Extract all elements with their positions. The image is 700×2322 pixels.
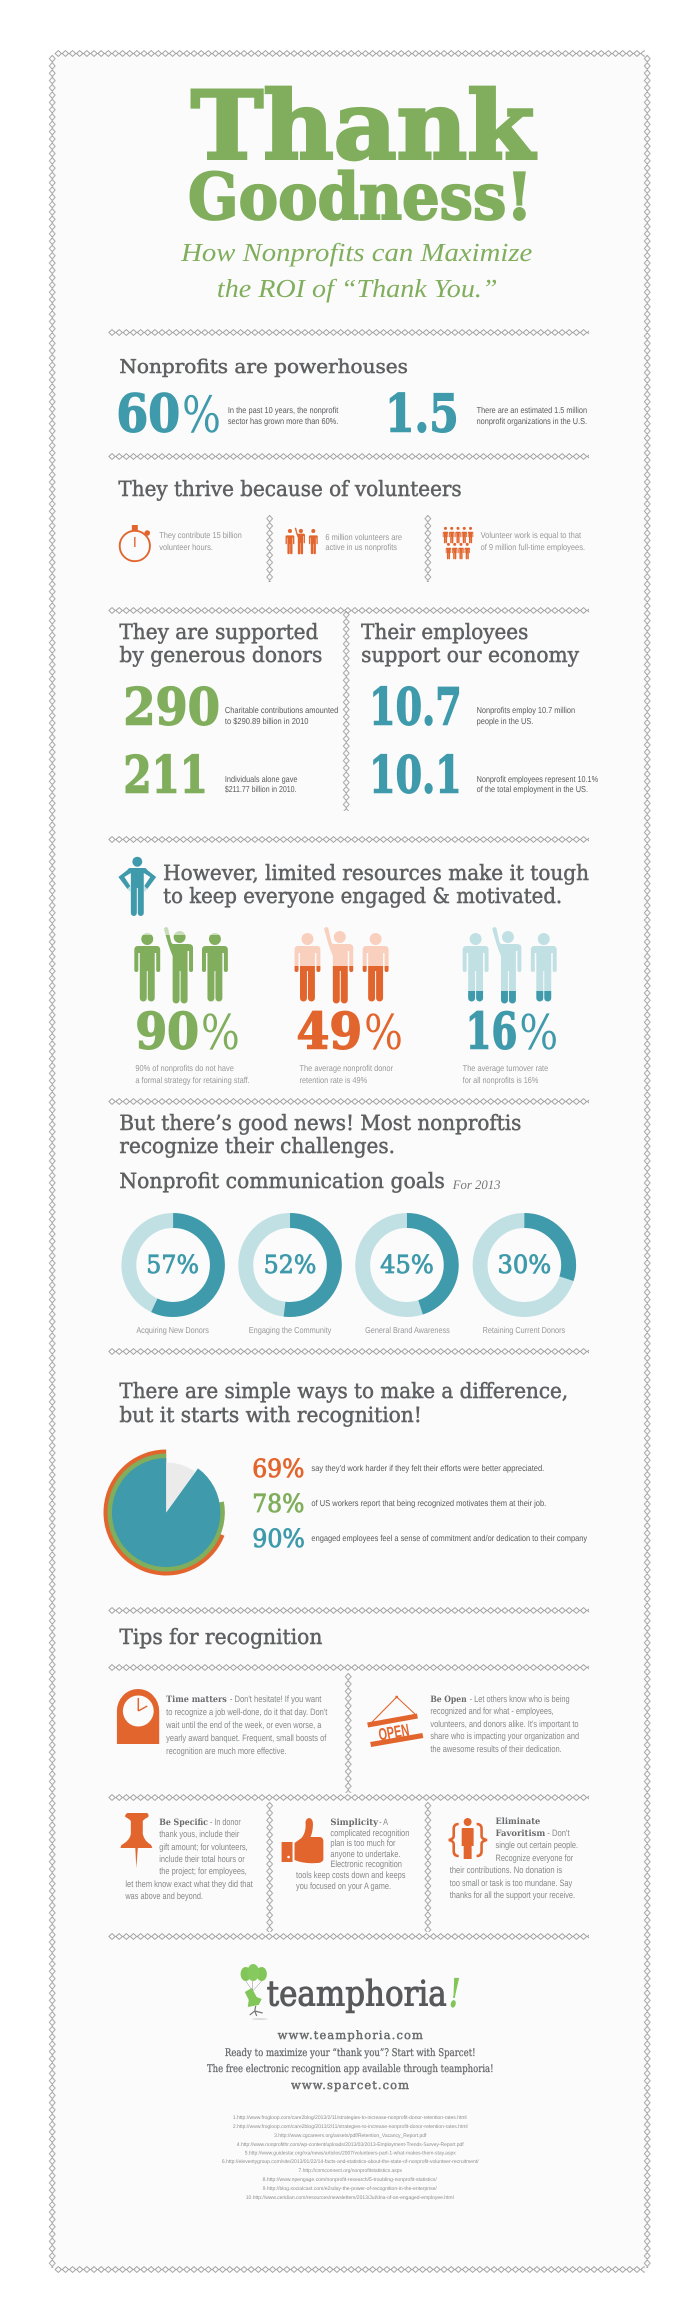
text: simplicity: - A — [379, 1817, 389, 1827]
caption: 16% — [463, 1063, 548, 1085]
text: employ: Nonprofits employ 10.7 million — [477, 705, 575, 715]
text: be specific: let them know exact what they did that — [125, 1879, 253, 1889]
text: eliminate favoritism: too small or task is too mundane. Say — [450, 1878, 572, 1888]
text: charitable contributions — [225, 705, 338, 726]
heading: employees — [361, 620, 579, 667]
panel: tip eliminate favoritism — [449, 1817, 578, 1900]
text: be open: the awesome results of their dedication. — [430, 1744, 562, 1754]
text: time matters: wait until the end of the week, or even worse, a — [165, 1720, 322, 1730]
heading: limited resources — [163, 861, 589, 908]
donut chart: 57%: 57% — [146, 1250, 199, 1279]
icon group: green people 90% — [134, 927, 228, 1004]
text: be specific: thank yous, include their — [159, 1829, 239, 1839]
stat: 60%: % — [182, 386, 221, 444]
stat: 90%: engaged employees feel a sense of commitment and/or dedication to their company — [311, 1533, 588, 1543]
subtitle — [180, 238, 532, 303]
stat: 60% — [116, 384, 221, 444]
text: eliminate favoritism: their contributions. No donation is — [450, 1865, 563, 1875]
heading: employees: Their employees — [361, 620, 528, 644]
references: 4.http://www.nonprofithr.com/wp-content/uploads/2013/03/2013-Employment-Trends-Survey-Report.pdf — [237, 2142, 464, 2148]
stat: 90% — [135, 1002, 240, 1061]
panel: tip be open — [367, 1694, 579, 1754]
text: employ: people in the US. — [477, 716, 533, 726]
text: volunteer hours: They contribute 15 billion — [159, 530, 242, 540]
icon: open sign — [367, 1696, 423, 1747]
text: be open: volunteers, and donors alike. It's important to — [430, 1719, 579, 1729]
caption: 90%: a formal strategy for retaining staff. — [135, 1075, 250, 1085]
stat: 60%: 60 — [116, 384, 180, 444]
icon: push pin — [120, 1813, 152, 1868]
heading: donors — [119, 620, 322, 667]
text: simplicity: complicated recognition — [330, 1828, 409, 1838]
text: eliminate favoritism: thanks for all the support your receive. — [450, 1890, 575, 1900]
heading: communication goals: Nonprofit communication goals — [119, 1169, 445, 1193]
text: employment share — [477, 774, 598, 794]
donut chart: 52% — [246, 1220, 334, 1310]
text: be specific: include their total hours or — [159, 1854, 245, 1864]
text: employ — [477, 705, 575, 726]
heading: simple ways: There are simple ways to make a difference, — [119, 1379, 568, 1403]
references — [222, 2115, 479, 2201]
icon: open sign: OPEN — [377, 1720, 411, 1744]
donut chart: 45% — [363, 1220, 451, 1310]
title: Thank — [191, 72, 536, 182]
stat: 69%: say they’d work harder if they felt their efforts were better appreciated. — [311, 1463, 544, 1473]
donut labels — [136, 1325, 565, 1335]
panel: donors — [119, 620, 338, 806]
text: active volunteers: active in us nonprofits — [325, 542, 397, 552]
heading: communication goals: For 2013 — [452, 1177, 501, 1192]
donut labels: General Brand Awareness — [365, 1325, 450, 1335]
wordmark exclamation: ! — [449, 1970, 461, 2017]
references: 1.http://www.frogloop.com/care2blog/2013/2/11/strategies-to-increase-nonprofit-donor-retention-rates.html — [233, 2115, 467, 2121]
heading: donors: They are supported — [119, 620, 318, 644]
donut chart: 57% — [129, 1220, 217, 1310]
text: eliminate favoritism: Eliminate — [496, 1817, 541, 1827]
panel: tip time matters — [117, 1689, 328, 1756]
text: sector growth: In the past 10 years, the nonprofit — [228, 405, 339, 415]
heading: tips for recognition: Tips for recognition — [119, 1625, 322, 1649]
stat: 16%: 16 — [466, 1002, 517, 1060]
references: 8.http://www.npengage.com/nonprofit-research/5-troubling-nonprofit-statistics/ — [263, 2177, 437, 2183]
donut labels: Acquiring New Donors — [136, 1325, 209, 1335]
text: organizations: There are an estimated 1.5 million — [477, 405, 587, 415]
text: sector growth — [228, 405, 339, 426]
heading: employees: support our economy — [361, 643, 579, 667]
call to action — [207, 2028, 494, 2092]
text: time matters: to recognize a job well-done, do it that day. Don't — [166, 1707, 328, 1717]
text: simplicity: anyone to undertake. — [330, 1849, 400, 1859]
donut chart: 45%: 45% — [380, 1250, 434, 1279]
caption: 16%: for all nonprofits is 16% — [463, 1075, 539, 1085]
stat: 1.5: 1.5 — [385, 384, 459, 444]
stat: 69%: 69% — [252, 1454, 304, 1483]
icon group: teal people 16% — [463, 927, 557, 1004]
text: be specific: Be Specific — [159, 1818, 208, 1828]
icon: person in braces — [449, 1818, 487, 1859]
icon: stopwatch — [120, 525, 150, 561]
panel: nonprofits are powerhouses — [116, 356, 587, 444]
logo: teamphoria — [241, 1964, 461, 2020]
text: eliminate favoritism: Favoritism — [496, 1829, 546, 1839]
panel: volunteers — [118, 477, 585, 582]
text: full-time equivalent: Volunteer work is equal to that — [481, 530, 582, 540]
text: organizations — [477, 405, 587, 426]
stat: 49%: % — [364, 1005, 403, 1061]
text: be specific — [125, 1817, 253, 1901]
text: be open: recognized and for what - employees, — [430, 1706, 554, 1716]
stat: 90%: 90% — [252, 1524, 305, 1553]
heading: volunteers: They thrive because of volunteers — [118, 477, 462, 501]
text: eliminate favoritism: - Don't — [547, 1828, 570, 1838]
text: be specific: the project; for employees, — [159, 1866, 247, 1876]
wordmark: teamphoria — [267, 1974, 447, 2014]
references: 7.http://cnmconnect.org/nonprofitstatistics.aspx — [299, 2168, 402, 2174]
text: be specific: gift amount; for volunteers, — [159, 1842, 248, 1852]
text: be specific: was above and beyond. — [125, 1891, 203, 1901]
caption: 49%: The average nonprofit donor — [299, 1063, 393, 1073]
text: volunteer hours: volunteer hours. — [159, 542, 213, 552]
stat: 10.1: 10.1 — [369, 746, 462, 806]
icon group: orange people 49% — [295, 927, 389, 1004]
text: be open: Be Open — [430, 1695, 467, 1705]
text: active volunteers: 6 million volunteers are — [325, 532, 402, 542]
text: time matters: - Don't hesitate! If you want — [230, 1694, 322, 1704]
text: full-time equivalent: of 9 million full-time employees. — [481, 542, 585, 552]
stat: 49% — [297, 1002, 403, 1061]
icon: three volunteers — [286, 528, 318, 554]
panel: simple ways — [104, 1379, 588, 1576]
text: be open: - Let others know who is being — [470, 1694, 570, 1704]
stat: 78%: 78% — [252, 1489, 304, 1518]
references: 3.http://www.cgcareers.org/assets/pdf/Retention_Vacancy_Report.pdf — [274, 2133, 427, 2139]
donut chart: 30% — [480, 1220, 569, 1310]
text: sector growth: sector has grown more than 60%. — [228, 416, 338, 426]
heading: powerhouses: Nonprofits are powerhouses — [119, 356, 408, 378]
text: be open: share who is impacting your organization and — [430, 1731, 579, 1741]
text: simplicity: plan is too much for — [330, 1838, 396, 1848]
text: time matters: recognition are much more effective. — [166, 1746, 287, 1756]
references: 5.http://www.guidestar.org/rxa/news/articles/2007/volunteers-part-1-what-makes-them-stay.aspx — [245, 2150, 456, 2156]
references: 2.http://www.frogloop.com/care2blog/2013/2/11/strategies-to-increase-nonprofit-donor-retention-rates.html — [233, 2124, 468, 2130]
stat: 49%: 49 — [297, 1002, 362, 1060]
text: charitable contributions: Charitable contributions amounted — [225, 705, 338, 715]
stat: 10.7: 10.7 — [369, 678, 462, 738]
call to action: www.sparcet.com — [291, 2078, 409, 2092]
references: 6.http://eleventygroup.com/site/2013/01/22/14-facts-and-statistics-about-the-state-of-nonprofit-volunteer-recruitment/ — [222, 2159, 479, 2165]
text: time matters: Time matters — [166, 1695, 227, 1705]
donut labels: Retaining Current Donors — [483, 1325, 565, 1335]
references: 10.http://www.ceridian.com/resources/newsletters/2013/Jul/dna-of-an-engaged-employee.html — [246, 2195, 454, 2201]
heading: simple ways — [119, 1379, 568, 1427]
panel: communication goals — [119, 1111, 569, 1335]
icon: balloons and chair — [241, 1964, 268, 2020]
text: individuals: $211.77 billion in 2010. — [225, 784, 297, 794]
caption: 90%: 90% of nonprofits do not have — [135, 1063, 234, 1073]
text: simplicity — [296, 1817, 409, 1891]
text: eliminate favoritism: single out certain people. — [496, 1840, 578, 1850]
panel: limited resources — [118, 857, 589, 1085]
heading: good news: recognize their challenges. — [119, 1134, 395, 1158]
icon: nine workers — [443, 527, 473, 559]
stat: 211: 211 — [123, 746, 208, 806]
caption: 16%: The average turnover rate — [463, 1063, 548, 1073]
text: simplicity: you focused on your A game. — [296, 1881, 391, 1891]
heading: donors: by generous donors — [119, 643, 322, 667]
donut chart: 52%: 52% — [264, 1250, 316, 1279]
text: individuals: Individuals alone gave — [225, 774, 298, 784]
stat: 90%: 90 — [135, 1002, 199, 1060]
text: time matters — [165, 1694, 328, 1756]
title — [188, 72, 536, 235]
heading: good news — [119, 1111, 521, 1158]
stat: 290: 290 — [123, 678, 220, 738]
stat: 78% — [252, 1489, 546, 1518]
icon: thumbs up — [282, 1818, 323, 1863]
text: employment share: Nonprofit employees represent 10.1% — [477, 774, 598, 784]
text: charitable contributions: to $290.89 billion in 2010 — [225, 716, 309, 726]
text: be specific: - In donor — [210, 1817, 241, 1827]
caption: 49% — [299, 1063, 393, 1085]
subtitle: How Nonprofits can Maximize — [180, 238, 532, 267]
title: Goodness! — [188, 160, 532, 235]
text: eliminate favoritism — [450, 1817, 578, 1900]
subtitle: the ROI of “Thank You.” — [217, 274, 498, 303]
text: simplicity: tools keep costs down and keeps — [296, 1870, 406, 1880]
text: be open — [430, 1694, 579, 1754]
panel: tip be specific — [120, 1813, 253, 1901]
stat: 90%: % — [201, 1005, 240, 1061]
donut chart: 30%: 30% — [498, 1250, 551, 1279]
icon: clock — [117, 1689, 159, 1744]
heading: good news: But there’s good news! Most nonproftis — [119, 1111, 521, 1135]
stat: 90% — [252, 1524, 588, 1553]
caption: 49%: retention rate is 49% — [299, 1075, 367, 1085]
text: volunteer hours — [159, 530, 242, 552]
text: time matters: yearly award banquet. Frequent, small boosts of — [166, 1733, 327, 1743]
caption: 90% — [135, 1063, 250, 1085]
panel: tip simplicity — [282, 1817, 409, 1891]
text: individuals — [225, 774, 298, 794]
heading: limited resources: However, limited resources make it tough — [163, 861, 589, 885]
text: employment share: of the total employment in the US. — [477, 784, 588, 794]
text: full-time equivalent — [481, 530, 585, 552]
stat: 69% — [252, 1454, 544, 1483]
heading: simple ways: but it starts with recognition! — [119, 1403, 422, 1427]
text: eliminate favoritism: Recognize everyone for — [496, 1853, 573, 1863]
text: simplicity: Electronic recognition — [330, 1859, 402, 1869]
text: active volunteers — [325, 532, 402, 552]
panel: employees — [361, 620, 598, 806]
text: simplicity: Simplicity — [330, 1818, 379, 1828]
call to action: www.teamphoria.com — [278, 2028, 423, 2042]
text: organizations: nonprofit organizations in the U.S. — [477, 416, 587, 426]
call to action: The free electronic recognition app available through teamphoria! — [207, 2063, 494, 2075]
call to action: Ready to maximize your “thank you”? Start with Sparcet! — [225, 2047, 476, 2059]
donut labels: Engaging the Community — [249, 1325, 332, 1335]
icon: teal person hands on hips — [118, 857, 156, 916]
pie chart: nested wedges — [104, 1450, 225, 1576]
stat: 16%: % — [519, 1005, 558, 1061]
heading: limited resources: to keep everyone engaged & motivated. — [163, 884, 562, 908]
references: 9.http://blog.socialcast.com/e2sday-the-power-of-recognition-in-the-enterprise/ — [263, 2186, 437, 2192]
stat: 78%: of US workers report that being recognized motivates them at their job. — [311, 1498, 546, 1508]
